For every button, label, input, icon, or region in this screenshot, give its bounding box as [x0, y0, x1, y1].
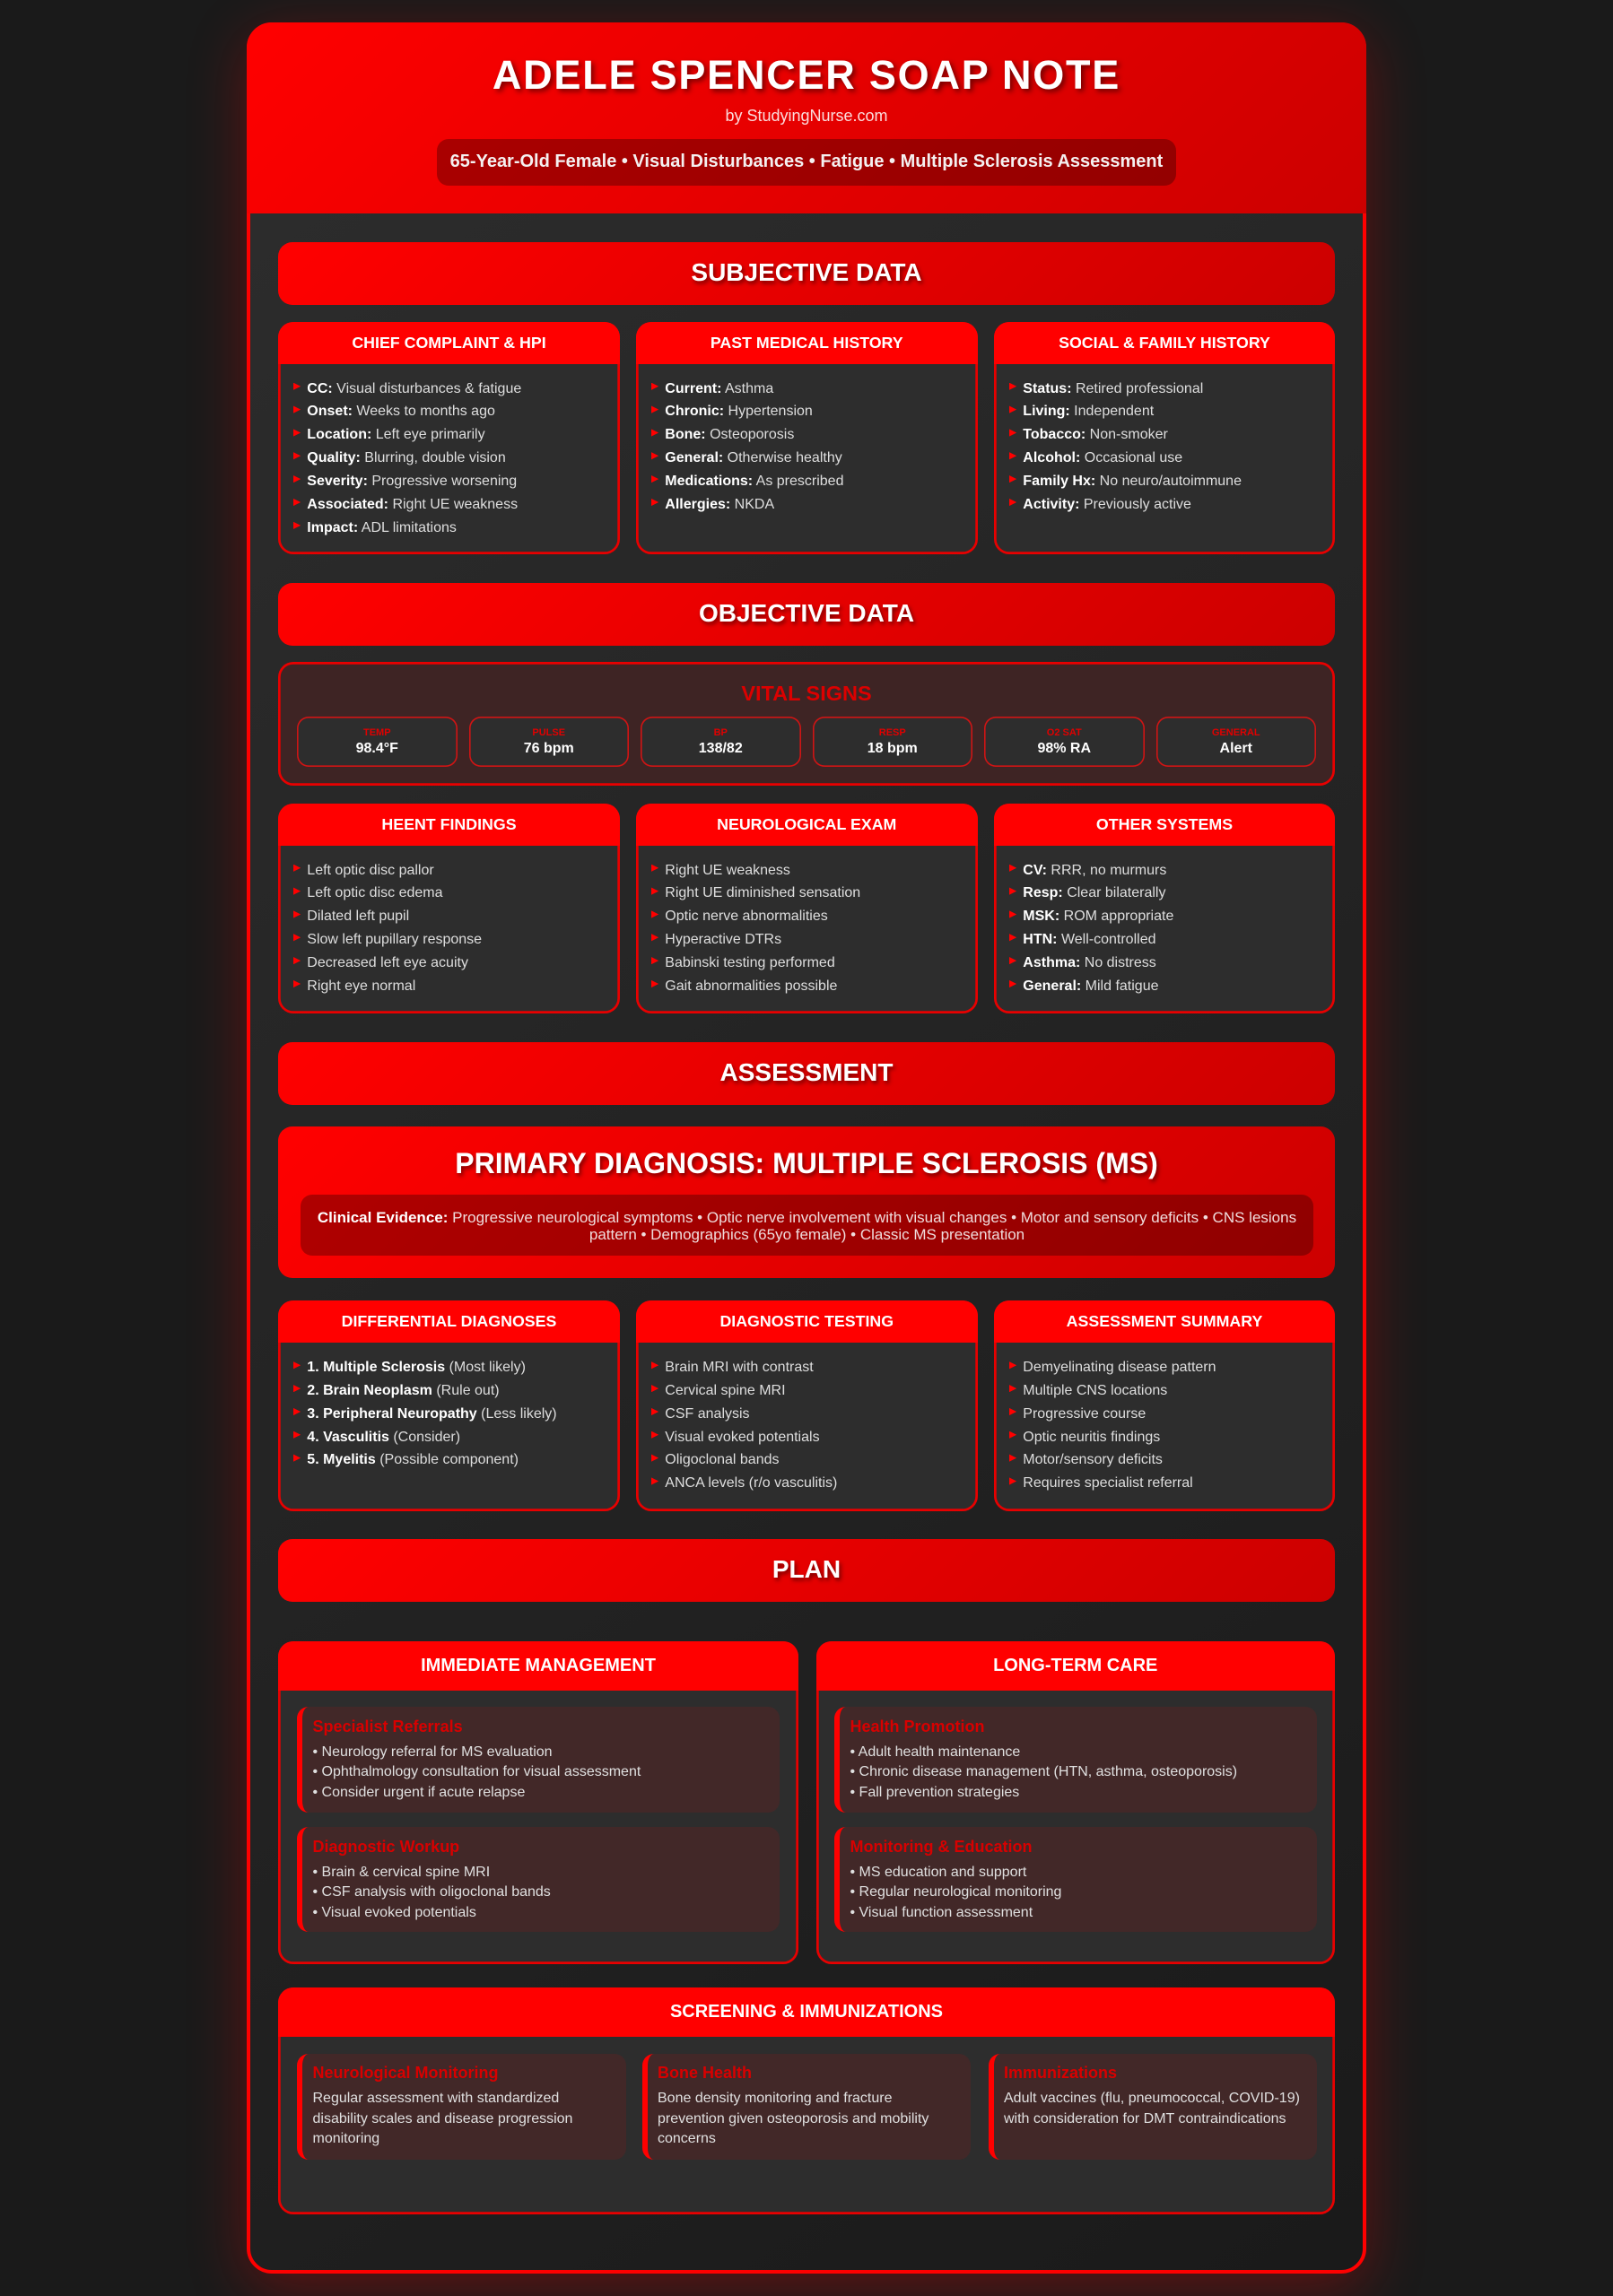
list: differentials: 1. Multiple Sclerosis (Most likely) [307, 1360, 526, 1375]
patient subtitle badge [437, 139, 1176, 186]
card heading [636, 1300, 978, 1343]
list: HEENT items: Dilated left pupil [307, 909, 409, 924]
list: neurological items: Gait abnormalities possible [665, 978, 837, 994]
list: past medical history items: General: Otherwise healthy [665, 450, 842, 465]
list: chief complaint items [293, 380, 521, 535]
panel: past medical history [636, 321, 978, 554]
card heading [636, 804, 978, 845]
sub-panel: immunizations [989, 2054, 1317, 2160]
list: other systems items [1009, 863, 1173, 994]
neurological monitoring text: monitoring [312, 2131, 379, 2146]
card heading [278, 1987, 1335, 2036]
card heading: OTHER SYSTEMS [1096, 814, 1233, 832]
section heading: objective data [278, 583, 1335, 646]
list: summary items: Requires specialist referral [1023, 1475, 1193, 1491]
neurological monitoring text: disability scales and disease progression [312, 2111, 572, 2126]
card heading: SCREENING & IMMUNIZATIONS [670, 2002, 943, 2022]
list: diagnostic tests: Brain MRI with contrast [665, 1360, 814, 1375]
list: chief complaint items: Severity: Progressive worsening [307, 474, 517, 489]
list: summary items: Progressive course [1023, 1406, 1146, 1422]
list: chief complaint items: Onset: Weeks to months ago [307, 404, 495, 419]
list: diagnostic tests: ANCA levels (r/o vasculitis) [665, 1475, 837, 1491]
sub-panel: bone health [642, 2054, 971, 2160]
card heading: LONG-TERM CARE [993, 1656, 1157, 1675]
referral list: • Ophthalmology consultation for visual assessment [312, 1764, 641, 1779]
panel: assessment summary [994, 1300, 1335, 1510]
card heading [816, 1641, 1335, 1690]
card heading: NEUROLOGICAL EXAM [717, 814, 896, 832]
workup list: • Brain & cervical spine MRI [312, 1865, 490, 1880]
vital: pulse: PULSE [532, 726, 565, 737]
list: chief complaint items: Location: Left eye primarily [307, 427, 485, 442]
list: differentials: 2. Brain Neoplasm (Rule out) [307, 1383, 500, 1398]
workup list [312, 1865, 551, 1920]
title: ADELE SPENCER SOAP NOTE [493, 52, 1120, 98]
panel: differential diagnoses [278, 1300, 620, 1510]
list: neurological items: Hyperactive DTRs [665, 932, 781, 947]
list: social history items [1009, 380, 1242, 512]
list: diagnostic tests: Cervical spine MRI [665, 1383, 786, 1398]
card heading: SOCIAL & FAMILY HISTORY [1059, 334, 1270, 352]
monitoring list: • Visual function assessment [850, 1905, 1033, 1920]
sub-panel heading: Neurological Monitoring [312, 2064, 499, 2082]
list: social history items: Tobacco: Non-smoker [1023, 427, 1168, 442]
monitoring list: • Regular neurological monitoring [850, 1884, 1061, 1900]
workup list: • CSF analysis with oligoclonal bands [312, 1884, 551, 1900]
panel: HEENT findings [278, 804, 620, 1013]
list: other systems items: Resp: Clear bilaterally [1023, 885, 1165, 900]
immunizations text: Adult vaccines (flu, pneumococcal, COVID-19) [1004, 2091, 1300, 2106]
list: other systems items: CV: RRR, no murmurs [1023, 863, 1166, 877]
list: chief complaint items: Quality: Blurring, double vision [307, 450, 506, 465]
list: neurological items [651, 863, 860, 994]
clinical evidence callout: pattern • Demographics (65yo female) • Classic MS presentation [589, 1225, 1024, 1243]
sub-panel heading: Bone Health [658, 2064, 752, 2082]
card heading: IMMEDIATE MANAGEMENT [421, 1656, 656, 1675]
vital signs heading: VITAL SIGNS [741, 682, 872, 705]
clinical evidence callout: Clinical Evidence: Progressive neurological symptoms • Optic nerve involvement with visual changes • Motor and sensory deficits • CNS lesions [318, 1209, 1296, 1225]
section heading: plan [278, 1539, 1335, 1602]
list: HEENT items: Left optic disc pallor [307, 863, 434, 877]
sub-panel: monitoring and education [834, 1827, 1317, 1932]
panel: social and family history [994, 321, 1335, 554]
list: differentials: 3. Peripheral Neuropathy (Less likely) [307, 1406, 557, 1422]
main container panel [247, 22, 1366, 2274]
card heading [994, 804, 1335, 845]
list: social history items: Activity: Previously active [1023, 497, 1191, 512]
sub-panel: diagnostic workup [297, 1827, 780, 1932]
section heading: subjective data [278, 242, 1335, 305]
card heading: CHIEF COMPLAINT & HPI [352, 334, 546, 352]
list: social history items: Living: Independent [1023, 404, 1154, 419]
vital: oxygen saturation: O2 SAT [1047, 726, 1082, 737]
list: differentials: 5. Myelitis (Possible component) [307, 1452, 519, 1467]
list: summary items: Demyelinating disease pattern [1023, 1360, 1216, 1375]
list: summary items: Multiple CNS locations [1023, 1383, 1167, 1398]
panel: screening and immunizations [278, 1987, 1335, 2214]
list: past medical history items: Chronic: Hypertension [665, 404, 813, 419]
panel: chief complaint and HPI [278, 321, 620, 554]
list: summary items: Optic neuritis findings [1023, 1430, 1160, 1445]
list: past medical history items: Bone: Osteoporosis [665, 427, 794, 442]
vital: temperature [297, 717, 458, 767]
list: neurological items: Optic nerve abnormalities [665, 909, 828, 924]
sub-panel: neurological monitoring [297, 2054, 626, 2160]
list: chief complaint items: CC: Visual disturbances & fatigue [307, 380, 521, 396]
list: differentials: 4. Vasculitis (Consider) [307, 1430, 460, 1445]
card heading [278, 321, 620, 364]
sub-panel: specialist referrals [297, 1707, 780, 1813]
list: differentials [293, 1360, 557, 1467]
list: social history items: Family Hx: No neuro/autoimmune [1023, 474, 1242, 489]
card heading [278, 804, 620, 845]
vital: blood pressure: 138/82 [699, 741, 743, 756]
section heading: objective data: OBJECTIVE DATA [699, 599, 914, 626]
list: social history items: Status: Retired professional [1023, 380, 1203, 396]
vital: blood pressure: BP [714, 726, 728, 737]
vital: pulse: 76 bpm [524, 741, 574, 756]
sub-panel heading: Specialist Referrals [312, 1717, 463, 1735]
section heading: subjective data: SUBJECTIVE DATA [691, 258, 922, 286]
card heading: DIFFERENTIAL DIAGNOSES [342, 1312, 556, 1330]
bone health text [658, 2091, 929, 2146]
list: summary items: Motor/sensory deficits [1023, 1452, 1163, 1467]
card heading [636, 321, 978, 364]
list: HEENT items: Left optic disc edema [307, 885, 443, 900]
neurological monitoring text: Regular assessment with standardized [312, 2091, 559, 2106]
workup list: • Visual evoked potentials [312, 1905, 476, 1920]
sub-panel: health promotion [834, 1707, 1317, 1813]
neurological monitoring text [312, 2091, 572, 2146]
section heading: assessment: ASSESSMENT [720, 1058, 893, 1085]
list: past medical history items [651, 380, 843, 512]
health promotion list: • Fall prevention strategies [850, 1785, 1019, 1800]
card heading [278, 1300, 620, 1343]
list: summary items [1009, 1360, 1216, 1491]
monitoring list [850, 1865, 1061, 1920]
panel: other systems [994, 804, 1335, 1013]
bone health text: concerns [658, 2131, 716, 2146]
list: social history items: Alcohol: Occasional use [1023, 450, 1182, 465]
immunizations text: with consideration for DMT contraindications [1004, 2111, 1286, 2126]
vital: oxygen saturation [984, 717, 1145, 767]
list: diagnostic tests: Oligoclonal bands [665, 1452, 779, 1467]
sub-panel heading: Monitoring & Education [850, 1837, 1032, 1855]
health promotion list: • Adult health maintenance [850, 1744, 1020, 1760]
immunizations text [1004, 2091, 1300, 2126]
list: chief complaint items: Associated: Right UE weakness [307, 497, 518, 512]
card heading: DIAGNOSTIC TESTING [719, 1312, 894, 1330]
list: diagnostic tests: CSF analysis [665, 1406, 750, 1422]
vital: temperature: TEMP [363, 726, 391, 737]
panel: long-term care [816, 1641, 1335, 1964]
referral list: • Neurology referral for MS evaluation [312, 1744, 553, 1760]
vital: general [1155, 717, 1316, 767]
referral list [312, 1744, 641, 1800]
list: past medical history items: Current: Asthma [665, 380, 773, 396]
card heading [994, 321, 1335, 364]
bone health text: Bone density monitoring and fracture [658, 2091, 892, 2106]
header banner [247, 22, 1366, 213]
panel: vital signs [278, 662, 1335, 786]
vital: respirations: RESP [879, 726, 906, 737]
list: diagnostic tests: Visual evoked potentials [665, 1430, 820, 1445]
list: other systems items: Asthma: No distress [1023, 955, 1156, 970]
list: HEENT items: Slow left pupillary response [307, 932, 482, 947]
card heading: ASSESSMENT SUMMARY [1067, 1312, 1262, 1330]
vital: oxygen saturation: 98% RA [1037, 741, 1091, 756]
list: other systems items: General: Mild fatigue [1023, 978, 1158, 994]
vital: general: Alert [1220, 741, 1252, 756]
list: past medical history items: Allergies: NKDA [665, 497, 774, 512]
health promotion list [850, 1744, 1237, 1800]
monitoring list: • MS education and support [850, 1865, 1026, 1880]
panel: immediate management [278, 1641, 798, 1964]
panel: diagnostic testing [636, 1300, 978, 1510]
bone health text: prevention given osteoporosis and mobility [658, 2111, 929, 2126]
sub-panel heading: Diagnostic Workup [312, 1837, 459, 1855]
patient subtitle badge: 65-Year-Old Female • Visual Disturbances • Fatigue • Multiple Sclerosis Assessment [450, 152, 1163, 171]
vital: blood pressure [641, 717, 800, 767]
panel: primary diagnosis [278, 1126, 1335, 1278]
card heading: PAST MEDICAL HISTORY [711, 334, 903, 352]
vital: general: GENERAL [1212, 726, 1260, 737]
card heading: HEENT FINDINGS [381, 814, 517, 832]
sub-panel heading: Health Promotion [850, 1717, 985, 1735]
byline: by StudyingNurse.com [725, 107, 888, 125]
referral list: • Consider urgent if acute relapse [312, 1785, 525, 1800]
primary diagnosis heading: PRIMARY DIAGNOSIS: MULTIPLE SCLEROSIS (MS) [455, 1147, 1158, 1179]
list: HEENT items [293, 863, 482, 994]
vital: respirations [813, 717, 972, 767]
list: HEENT items: Right eye normal [307, 978, 415, 994]
vital: temperature: 98.4°F [356, 741, 398, 756]
clinical evidence callout [301, 1195, 1313, 1256]
vital: pulse [468, 717, 629, 767]
section heading: plan: PLAN [772, 1555, 841, 1583]
card heading [994, 1300, 1335, 1343]
list: neurological items: Babinski testing performed [665, 955, 835, 970]
panel: neurological exam [636, 804, 978, 1013]
health promotion list: • Chronic disease management (HTN, asthma, osteoporosis) [850, 1764, 1237, 1779]
list: other systems items: HTN: Well-controlled [1023, 932, 1155, 947]
card heading [278, 1641, 798, 1690]
list: neurological items: Right UE diminished sensation [665, 885, 860, 900]
list: other systems items: MSK: ROM appropriate [1023, 909, 1173, 924]
list: HEENT items: Decreased left eye acuity [307, 955, 468, 970]
sub-panel heading: Immunizations [1004, 2064, 1117, 2082]
list: neurological items: Right UE weakness [665, 863, 790, 877]
list: past medical history items: Medications: As prescribed [665, 474, 843, 489]
list: diagnostic tests [651, 1360, 837, 1491]
section heading: assessment [278, 1042, 1335, 1105]
vital: respirations: 18 bpm [868, 741, 918, 756]
list: chief complaint items: Impact: ADL limitations [307, 520, 457, 535]
